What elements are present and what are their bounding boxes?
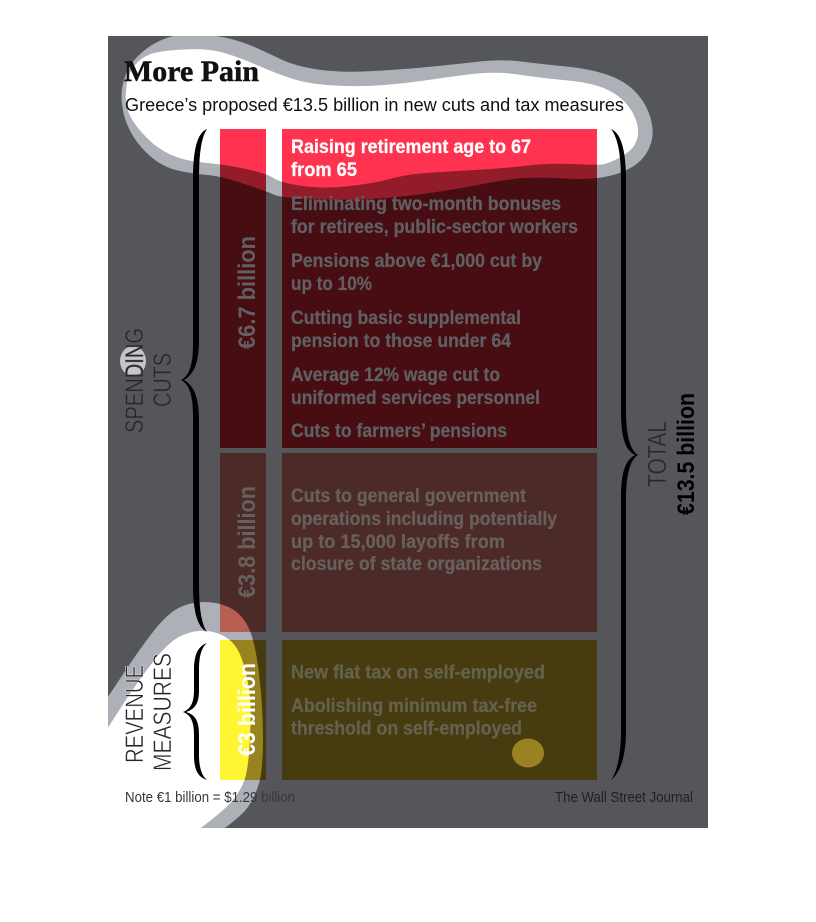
text: spending items: Eliminating two-month bonuses xyxy=(291,194,561,215)
panel: revenue measures xyxy=(282,640,597,780)
label: revenue measures xyxy=(121,653,177,771)
bar: 3.8 billion segment xyxy=(220,453,266,632)
text: government cuts: up to 15,000 layoffs from xyxy=(291,532,505,553)
bracket: total xyxy=(611,129,638,780)
label: spending cuts xyxy=(121,328,177,433)
label: spending cuts: CUTS xyxy=(149,353,177,407)
text: spending items: up to 10% xyxy=(291,274,372,295)
text: government cuts: operations including potentially xyxy=(291,509,557,530)
spotlight: lower-left halo xyxy=(108,602,260,828)
text: government cuts xyxy=(291,486,557,575)
text: revenue items: Abolishing minimum tax-free xyxy=(291,696,537,717)
spotlight: top bright area xyxy=(126,49,638,182)
text: spending items: for retirees, public-sector workers xyxy=(291,217,578,238)
text: raising retirement age: from 65 xyxy=(291,160,357,181)
label: total: €13.5 billion xyxy=(673,393,700,515)
dark background panel xyxy=(108,36,708,828)
panel: retirement and pension cuts xyxy=(282,129,597,448)
bracket: spending cuts xyxy=(181,129,207,632)
text: government cuts: closure of state organizations xyxy=(291,554,542,575)
text: raising retirement age: Raising retirement age to 67 xyxy=(291,137,531,158)
text: revenue items: New flat tax on self-employed xyxy=(291,662,545,684)
title: More Pain xyxy=(124,55,259,88)
text: revenue items xyxy=(291,662,545,740)
text: spending items: Cutting basic supplemental xyxy=(291,308,521,329)
bar column xyxy=(220,129,266,780)
panel: general government cuts xyxy=(282,453,597,632)
text: spending items: Cuts to farmers’ pensions xyxy=(291,421,507,442)
text: spending items: Average 12% wage cut to xyxy=(291,365,500,386)
text: revenue items: threshold on self-employed xyxy=(291,718,522,740)
footnote: Note €1 billion = $1.29 billion xyxy=(125,789,295,806)
spotlight: top halo xyxy=(122,36,653,197)
bar value: 3.8 billion: €3.8 billion xyxy=(234,486,261,598)
bar value: 3 billion: €3 billion xyxy=(234,663,261,756)
text: raising retirement age xyxy=(291,137,531,181)
spot: yellow dot in revenue panel xyxy=(512,738,544,768)
bracket: revenue measures xyxy=(183,643,207,780)
label: revenue measures: MEASURES xyxy=(149,653,177,771)
label: revenue measures: REVENUE xyxy=(121,665,149,763)
spotlight: lower-left bright area xyxy=(108,630,244,828)
text: government cuts: Cuts to general government xyxy=(291,486,527,507)
spot: small dot on spending label xyxy=(120,346,146,376)
bar: 3 billion segment xyxy=(220,640,266,780)
source: The Wall Street Journal xyxy=(555,789,693,806)
bar: 6.7 billion segment xyxy=(220,129,266,448)
label: total xyxy=(642,393,700,515)
label: spending cuts: SPENDING xyxy=(121,328,149,433)
bar value: 6.7 billion: €6.7 billion xyxy=(234,236,261,349)
text: spending items: Pensions above €1,000 cut by xyxy=(291,251,542,272)
text: spending items: pension to those under 64 xyxy=(291,331,511,352)
text: spending items xyxy=(291,194,578,442)
label: total: TOTAL xyxy=(642,421,672,487)
text: spending items: uniformed services personnel xyxy=(291,388,540,409)
subtitle: Greece’s proposed €13.5 billion in new cuts and tax measures xyxy=(125,94,624,115)
